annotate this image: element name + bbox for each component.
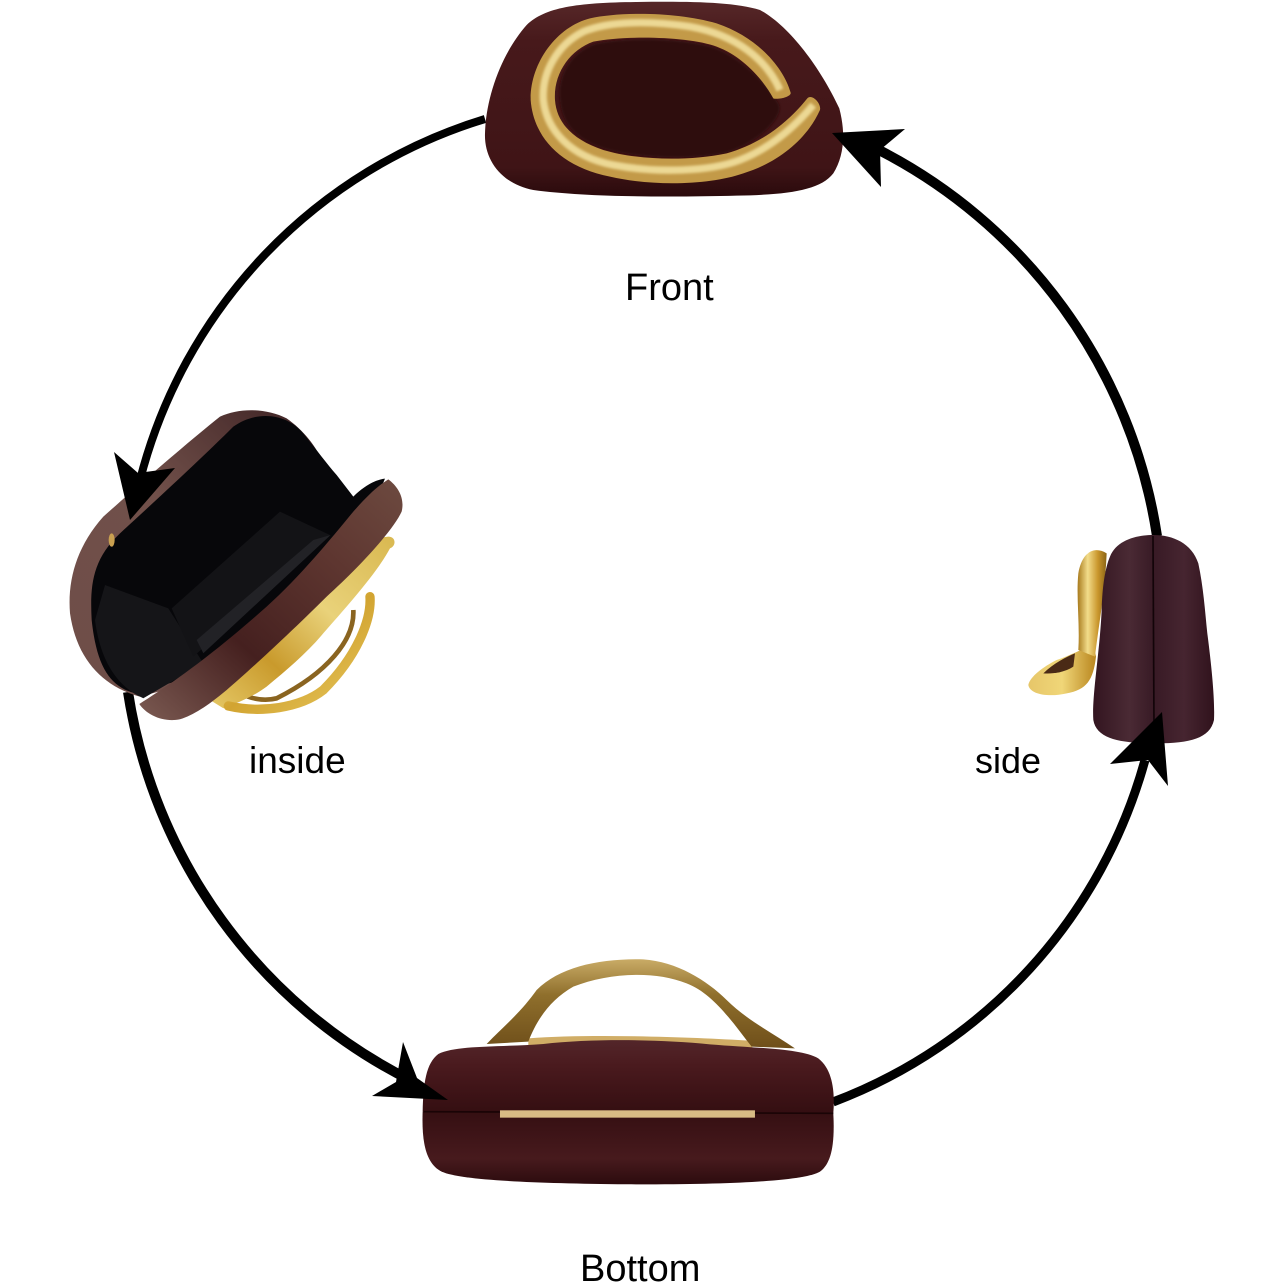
arrowhead: top right [832, 129, 905, 187]
gold handles [210, 537, 395, 709]
bag: bottom view [422, 959, 834, 1184]
seam [1150, 536, 1156, 723]
hinge [500, 1110, 755, 1118]
lining floor [172, 512, 330, 657]
handle opening [1043, 653, 1075, 674]
gold foot [1028, 643, 1096, 695]
bag: inside view [70, 410, 402, 720]
arrowhead: left [114, 452, 175, 520]
label: inside: inside [249, 740, 346, 781]
arrowhead: bottom [372, 1042, 448, 1100]
seam [423, 1112, 833, 1113]
main rod [210, 537, 395, 708]
handle highlight [543, 23, 813, 170]
arrowhead: right [1110, 712, 1168, 786]
arrow: bottom to side [833, 760, 1145, 1102]
outer shell [70, 410, 360, 697]
label: side: side [975, 740, 1041, 781]
lower shell [422, 1112, 834, 1184]
inner rod [240, 610, 353, 700]
upper shell [423, 1040, 834, 1113]
grey lining panel [95, 585, 203, 698]
bag body [485, 2, 843, 197]
gold handle [487, 959, 795, 1048]
ring rod [228, 597, 370, 709]
bag: side view [1028, 535, 1214, 743]
hinged lid [139, 479, 402, 720]
arrow: inside to bottom [128, 692, 410, 1080]
black lining [91, 416, 385, 693]
gold handle [531, 14, 820, 183]
gold upright [1078, 550, 1107, 657]
bag: front view [485, 2, 843, 197]
gold plate [528, 1036, 753, 1050]
grey pocket [197, 535, 331, 653]
arrow: side to front [875, 148, 1157, 536]
bag body [1093, 535, 1214, 743]
label: Front: Front [625, 267, 714, 309]
dark centre panel [560, 39, 780, 157]
arrow: front to inside [140, 119, 485, 480]
clasp [109, 533, 115, 547]
